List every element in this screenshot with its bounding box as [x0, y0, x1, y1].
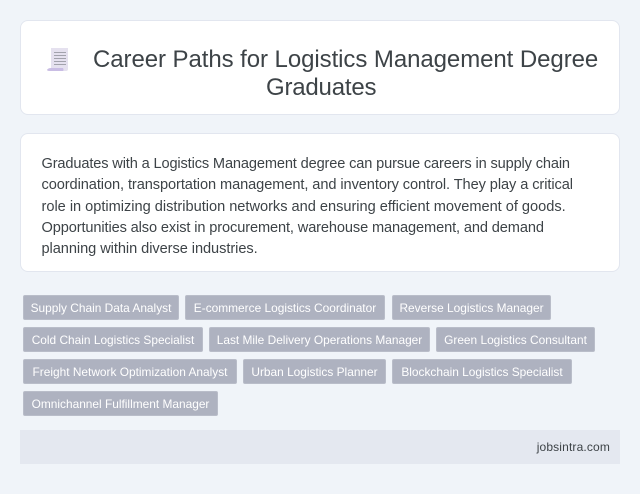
summary text: role in optimizing distribution networks and ensuring efficient movement of goods. — [42, 199, 566, 215]
tag: Supply Chain Data Analyst — [31, 301, 171, 315]
tag — [392, 295, 551, 320]
tag: Blockchain Logistics Specialist — [401, 365, 563, 379]
tag: Freight Network Optimization Analyst — [33, 365, 227, 379]
tag — [436, 327, 595, 352]
tag: Urban Logistics Planner — [251, 365, 378, 379]
tag — [23, 359, 237, 384]
tag — [23, 327, 203, 352]
tag — [209, 327, 430, 352]
tag: Green Logistics Consultant — [444, 333, 587, 347]
tag: E-commerce Logistics Coordinator — [194, 301, 376, 315]
summary text — [42, 156, 573, 257]
tag list — [23, 295, 595, 416]
summary text: coordination, transportation management, and inventory control. They play a critical — [42, 177, 573, 193]
icon: document scroll — [47, 48, 68, 71]
source: jobsintra.com — [537, 440, 610, 454]
title — [93, 46, 598, 101]
tag: Reverse Logistics Manager — [399, 301, 544, 315]
summary text: Opportunities also exist in procurement, warehouse management, and demand — [42, 220, 544, 236]
summary text: Graduates with a Logistics Management degree can pursue careers in supply chain — [42, 156, 570, 172]
tag — [23, 295, 179, 320]
tag — [392, 359, 572, 384]
tag: Omnichannel Fulfillment Manager — [32, 397, 209, 411]
header panel — [20, 20, 620, 115]
tag — [243, 359, 386, 384]
tag — [185, 295, 385, 320]
footer bar — [20, 430, 620, 464]
tag: Cold Chain Logistics Specialist — [32, 333, 194, 347]
summary panel — [20, 133, 620, 272]
tag — [23, 391, 218, 416]
tag: Last Mile Delivery Operations Manager — [217, 333, 422, 347]
title: Graduates — [266, 74, 376, 101]
title: Career Paths for Logistics Management Degree — [93, 46, 598, 73]
summary text: planning within diverse industries. — [42, 241, 258, 257]
